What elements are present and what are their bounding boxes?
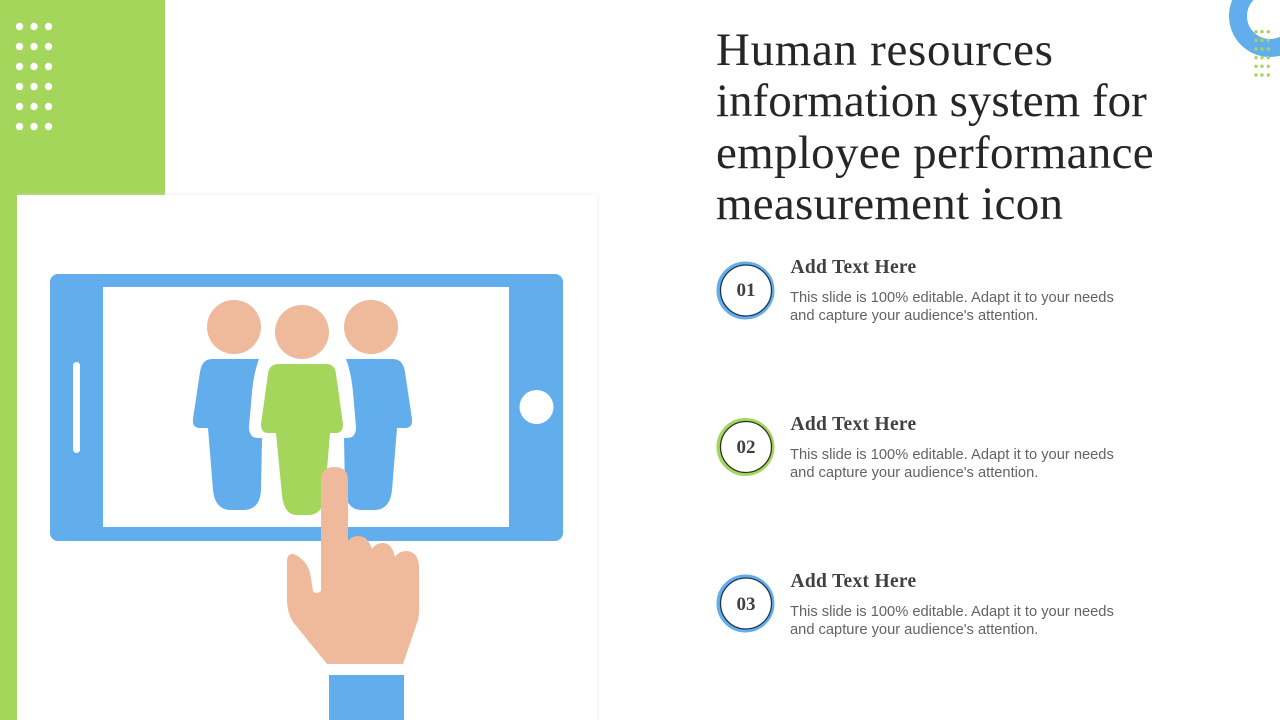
person left <box>193 300 262 510</box>
item 3 heading: Add Text Here <box>790 571 916 592</box>
item 3 description: and capture your audience's attention. <box>790 622 1038 638</box>
title: information system for <box>716 75 1147 127</box>
title <box>716 24 1154 230</box>
dot grid: green <box>1254 30 1270 77</box>
item 3 description: This slide is 100% editable. Adapt it to your needs <box>790 604 1114 620</box>
item 2 heading: Add Text Here <box>790 414 916 435</box>
title: Human resources <box>716 24 1054 76</box>
number badge 01 ring <box>718 264 772 318</box>
title: employee performance <box>716 127 1154 179</box>
number 03: 03 <box>736 594 756 615</box>
number 02: 02 <box>736 437 756 458</box>
title: measurement icon <box>716 178 1063 230</box>
dot grid: white <box>16 23 52 130</box>
green corner panel <box>0 0 165 720</box>
item 1 heading: Add Text Here <box>790 257 916 278</box>
item 3 description <box>790 604 1114 638</box>
white illustration panel <box>17 194 598 720</box>
number badge 02 ring <box>718 420 772 474</box>
person centre <box>261 305 343 515</box>
item 1 description: This slide is 100% editable. Adapt it to your needs <box>790 290 1114 306</box>
item 1 description <box>790 290 1114 324</box>
number badge 03 ring <box>718 576 772 630</box>
decorative blue ring <box>1238 0 1280 48</box>
item 2 description: This slide is 100% editable. Adapt it to your needs <box>790 446 1114 462</box>
item 2 description: and capture your audience's attention. <box>790 465 1038 481</box>
item 2 description <box>790 446 1114 481</box>
icon: pointing hand <box>287 467 419 720</box>
person right <box>344 300 412 510</box>
icon: smartphone <box>50 274 563 541</box>
number 01: 01 <box>736 280 756 301</box>
item 1 description: and capture your audience's attention. <box>790 308 1038 324</box>
icon: group of three people <box>193 300 412 515</box>
